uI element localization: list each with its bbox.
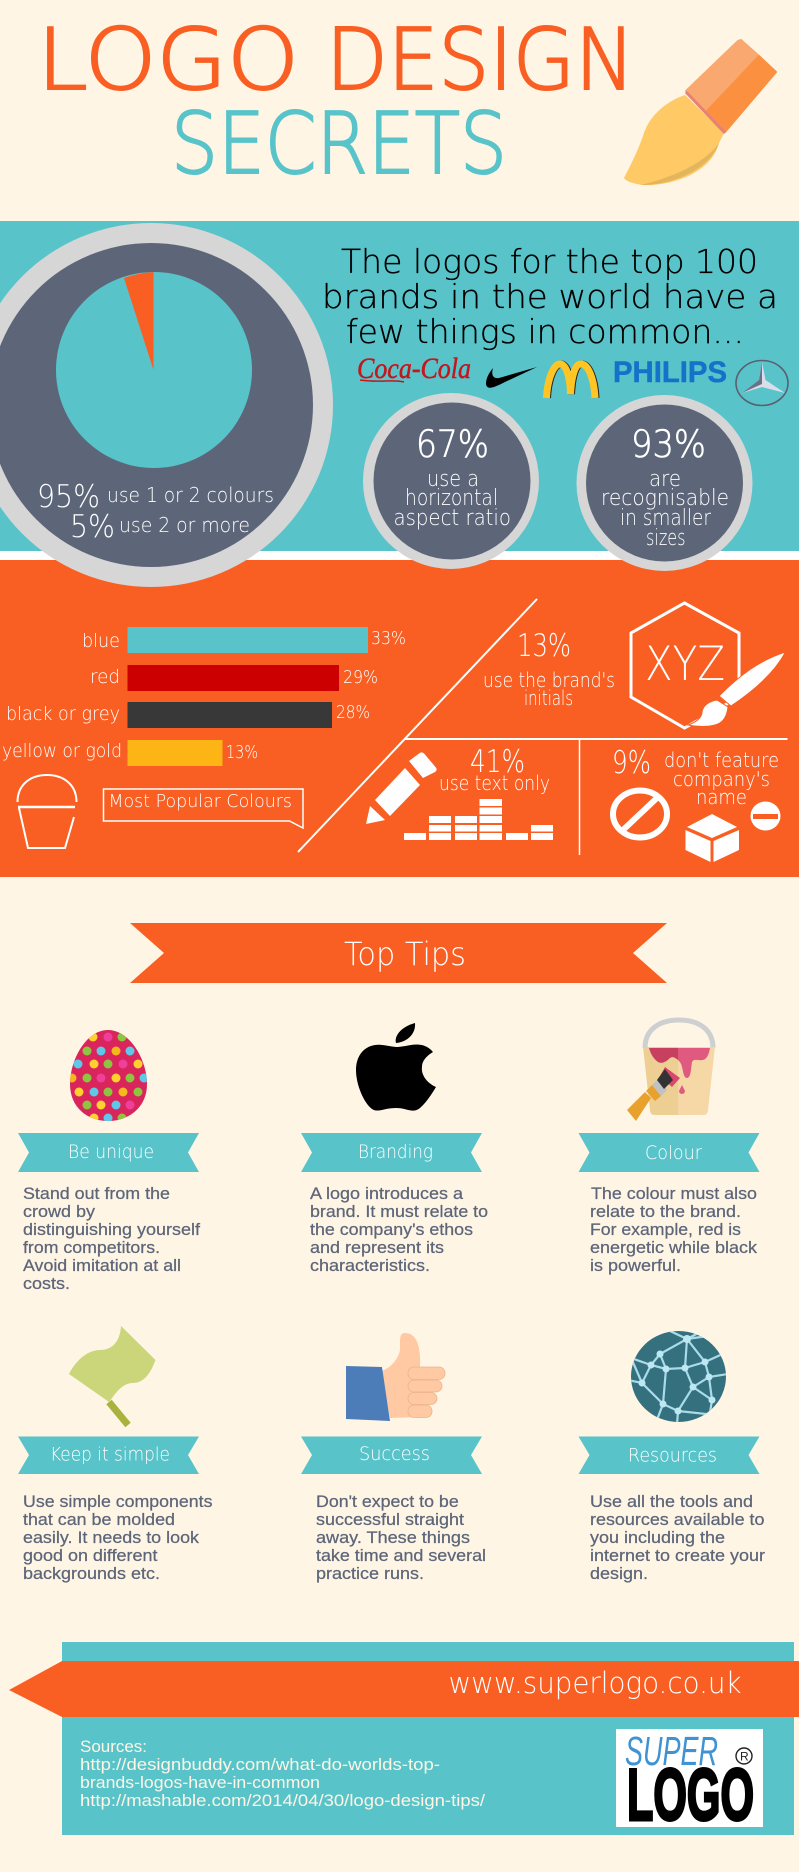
ribbon: resources [578,1436,760,1474]
stat: 93 percent recognisable: in smaller [620,506,712,531]
icon: thumbs up [346,1333,445,1421]
text: colour body: For example, red is [590,1220,741,1239]
icon: box [686,814,739,862]
stat: 41 percent text only: 41% [470,744,525,780]
heading: top 100 brands: brands in the world have a [322,277,778,316]
icon: paint bucket [627,1020,715,1121]
logo: Philips: PHILIPS [613,356,727,389]
stat: 93 percent recognisable: are [649,467,681,492]
text: branding body: characteristics. [310,1256,430,1275]
tip: branding [301,1023,488,1275]
callout: most popular colours [104,789,303,828]
logo: super logo: SUPER [625,1728,718,1774]
icon: globe network [628,1331,728,1425]
text: keep it simple body: good on different [23,1546,158,1565]
bar: yellow or gold: 13% [226,742,258,763]
text: colour body: The colour must also [591,1184,757,1203]
text: success body: take time and several [316,1546,486,1565]
bar: blue: 33% [371,628,406,649]
brand logos row [357,352,788,406]
logo: McDonald's arches [546,364,596,398]
stat: 93 percent recognisable: sizes [646,526,686,551]
stat: 13 percent initials: use the brand's [483,668,615,692]
bar: red: red [90,666,120,688]
logo: Coca-Cola: Coca-Cola [357,352,471,385]
bar: yellow or gold: yellow or gold [2,740,122,762]
text: keep it simple body: Use simple components [23,1492,212,1511]
icon: XYZ hexagon: XYZ [645,637,725,692]
title [37,11,635,194]
text: branding body: brand. It must relate to [310,1202,488,1221]
tip: resources [578,1331,765,1583]
panel: teal band [0,221,799,551]
stat: 93 percent recognisable [576,395,752,571]
text: be unique body: Stand out from the [23,1184,170,1203]
text: branding body: the company's ethos [310,1220,473,1239]
tip: colour [578,1020,760,1275]
stat: 13 percent initials [483,628,615,710]
ribbon: branding: Branding [358,1141,433,1163]
tip: be unique [18,1030,200,1293]
icon: apple [356,1023,436,1111]
stat: 9 percent no name: 9% [612,745,651,781]
ribbon: success: Success [359,1443,430,1465]
text: keep it simple body: that can be molded [23,1510,175,1529]
banner: top tips [130,923,667,983]
bar: yellow or gold [2,740,258,766]
divider lines [298,599,788,855]
text: keep it simple body [23,1492,212,1583]
icon: dotted egg [68,1030,148,1122]
ribbon: colour: Colour [645,1142,702,1164]
stat: 9 percent no name: don't feature [664,748,779,772]
icon: minus circle [750,802,780,830]
ribbon: success [301,1436,482,1474]
ribbon: keep it simple: Keep it simple [50,1444,170,1466]
text: branding body [310,1184,488,1275]
ribbon: branding [301,1133,482,1172]
text: be unique body: crowd by [23,1202,96,1221]
text: resources body: Use all the tools and [590,1492,753,1511]
icon: flag [69,1326,156,1425]
text: success body: successful straight [316,1510,464,1529]
icon: prohibited sign [613,790,667,838]
strip: white divider [0,551,799,560]
stat: 67 percent horizontal: horizontal [405,486,498,511]
text: resources body: resources available to [590,1510,764,1529]
tip: keep it simple [18,1326,212,1583]
text: resources body: internet to create your [590,1546,765,1565]
chart: colours used pie: use 1 or 2 colours [107,483,274,507]
text: be unique body: costs. [23,1274,70,1293]
stat: 41 percent text only [439,744,550,795]
text: success body: Don't expect to be [316,1492,459,1511]
banner: website arrow [9,1661,799,1717]
icon: XYZ hexagon [631,603,739,728]
text: success body [316,1492,486,1583]
text: sources: Sources: [80,1737,147,1756]
logo: super logo: R [740,1750,749,1764]
text: branding body: A logo introduces a [310,1184,464,1203]
icon: pencil [366,752,437,824]
icon: stacked block chart [404,799,553,840]
heading: top 100 brands: The logos for the top 100 [341,242,758,281]
icon: bucket outline [18,775,76,848]
stat: 9 percent no name [612,745,779,809]
ribbon: colour [578,1133,760,1172]
text: branding body: and represent its [310,1238,444,1257]
panel: footer [62,1642,794,1835]
text: colour body: energetic while black [590,1238,758,1257]
text: resources body [590,1492,765,1583]
callout: most popular colours: Most Popular Colours [108,791,292,812]
text: sources: http://mashable.com/2014/04/30/logo-design-tips/ [80,1791,485,1810]
title: LOGO [37,11,299,110]
text: resources body: you including the [590,1528,725,1547]
text: be unique body: Avoid imitation at all [23,1256,181,1275]
heading: top 100 brands: few things in common... [346,312,744,351]
title: SECRETS [171,95,507,194]
title: DESIGN [326,11,635,110]
stat: 67 percent horizontal: 67% [416,423,489,466]
banner: top tips: Top Tips [344,935,466,973]
stat: 67 percent horizontal: aspect ratio [394,506,511,531]
stat: 13 percent initials: 13% [517,628,571,664]
text: sources: brands-logos-have-in-common [80,1773,320,1792]
ribbon: be unique [18,1133,199,1172]
stat: 41 percent text only: use text only [439,771,550,795]
text: sources [80,1737,485,1810]
text: keep it simple body: backgrounds etc. [23,1564,160,1583]
ribbon: be unique: Be unique [68,1141,154,1163]
text: be unique body: from competitors. [23,1238,160,1257]
text: be unique body: distinguishing yourself [23,1220,200,1239]
stat: 9 percent no name: name [696,785,747,809]
stat: 93 percent recognisable: recognisable [601,486,729,511]
text: resources body: design. [590,1564,648,1583]
panel: orange stats band [0,560,799,877]
bar: blue: blue [82,630,120,652]
stat: 13 percent initials: initials [524,686,573,710]
text: sources: http://designbuddy.com/what-do-worlds-top- [80,1755,440,1774]
stat: 67 percent horizontal: use a [427,467,479,492]
stat: 9 percent no name: company's [673,767,770,791]
stat: 67 percent horizontal [363,393,539,569]
banner: website arrow: www.superlogo.co.uk [448,1666,742,1700]
text: success body: away. These things [316,1528,470,1547]
stat: 93 percent recognisable: 93% [631,423,706,466]
text: colour body [590,1184,758,1275]
chart: colours used pie: 5% [70,509,115,545]
logo: Nike swoosh [486,367,537,388]
heading: top 100 brands [322,242,778,351]
bar: red: 29% [343,667,378,688]
tip: success [301,1333,486,1583]
chart: colours used pie [0,223,333,587]
bar: black or grey [6,702,370,728]
bar chart: most popular colours [2,627,406,766]
text: colour body: is powerful. [590,1256,681,1275]
logo: Mercedes star [736,360,788,406]
chart: colours used pie: 95% [37,479,100,515]
bar: red [90,665,378,691]
logo: super logo [616,1728,763,1836]
text: be unique body [23,1184,200,1293]
bar: blue [82,627,406,653]
text: colour body: relate to the brand. [590,1202,741,1221]
bar: black or grey: black or grey [6,703,120,725]
text: keep it simple body: easily. It needs to look [23,1528,200,1547]
chart: colours used pie: use 2 or more [119,513,250,537]
ribbon: resources: Resources [628,1444,717,1466]
icon: paint brush [624,40,776,185]
ribbon: keep it simple [18,1436,199,1474]
text: success body: practice runs. [316,1564,424,1583]
bar: black or grey: 28% [336,702,370,723]
icon: paintbrush [688,652,786,726]
